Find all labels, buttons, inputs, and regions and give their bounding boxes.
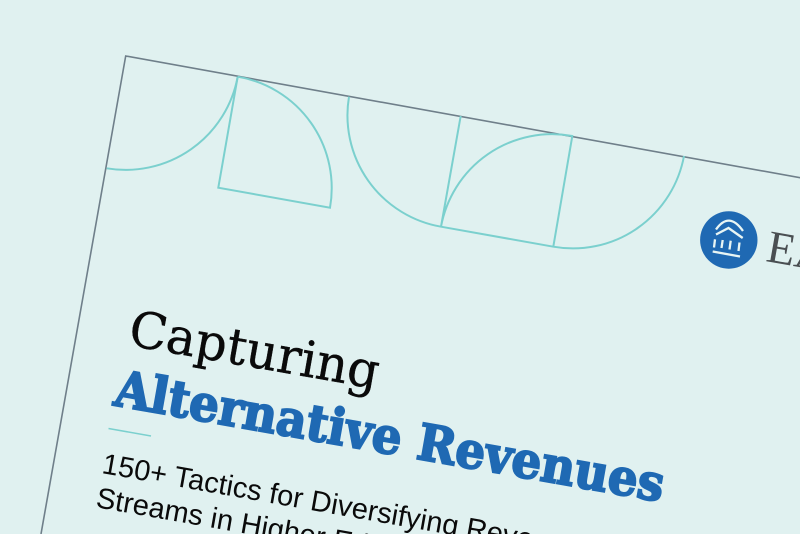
geometric arc pattern: [107, 77, 684, 248]
accent rule: [108, 428, 151, 436]
icon: college building: [713, 221, 743, 256]
logo badge: [700, 211, 758, 269]
title line 2: Alternative Revenues: [109, 359, 669, 514]
logo: [700, 211, 758, 269]
title line 1: Capturing: [125, 300, 384, 401]
